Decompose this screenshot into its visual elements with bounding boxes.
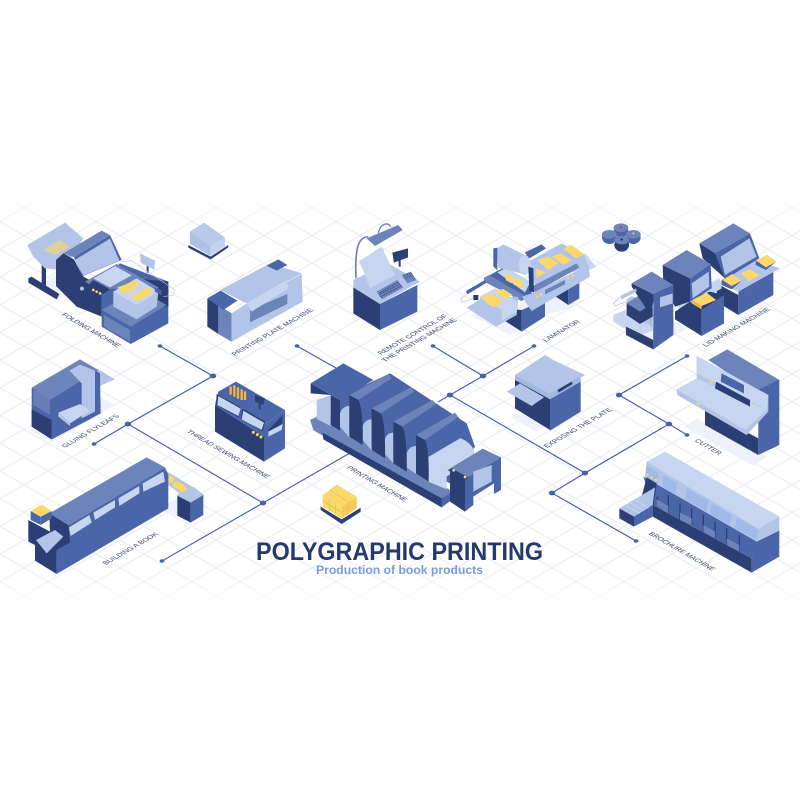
machine: exposing the plate <box>507 355 585 432</box>
icon: pallet box <box>188 223 228 259</box>
label: building a book: BUILDING A BOOK <box>102 532 161 566</box>
label: brochure machine: BROCHURE MACHINE <box>646 531 717 572</box>
label: laminator: LAMINATOR <box>542 319 582 343</box>
label: lid-making machine: LID-MAKING MACHINE <box>702 307 773 348</box>
subtitle: Production of book products <box>316 563 483 577</box>
flowchart connectors <box>92 344 689 563</box>
machine: folding machine <box>27 223 175 344</box>
machine: cutter <box>677 349 779 466</box>
machine: thread sewing machine <box>215 382 285 462</box>
label: remote control line 1: REMOTE CONTROL OF <box>377 314 450 356</box>
label: exposing the plate: EXPOSING THE PLATE <box>543 407 615 449</box>
title: POLYGRAPHIC PRINTING <box>256 538 543 566</box>
machine: building a book <box>28 457 204 574</box>
label: folding machine: FOLDING MACHINE <box>59 312 122 349</box>
machine: lid-making machine <box>613 223 780 349</box>
icon: pallet of yellow books <box>321 485 361 524</box>
label: printing plate machine: PRINTING PLATE MACHINE <box>231 308 316 357</box>
label: remote control line 2: THE PRINTING MACHINE <box>381 318 459 363</box>
label: gluing flyleafs: GLUING FLYLEAFS <box>61 414 122 449</box>
machine: gluing flyleafs <box>28 359 115 442</box>
machine: laminator <box>461 243 596 335</box>
machine: brochure machine <box>619 452 779 573</box>
label: thread sewing machine: THREAD SEWING MACHINE <box>184 429 271 480</box>
machine: printing plate machine <box>207 259 303 342</box>
machine: printing machine <box>310 363 501 512</box>
label: cutter: CUTTER <box>692 438 723 456</box>
machine: remote control console <box>353 224 420 330</box>
icon: ink rollers <box>602 223 641 252</box>
label: printing machine: PRINTING MACHINE <box>344 465 409 503</box>
